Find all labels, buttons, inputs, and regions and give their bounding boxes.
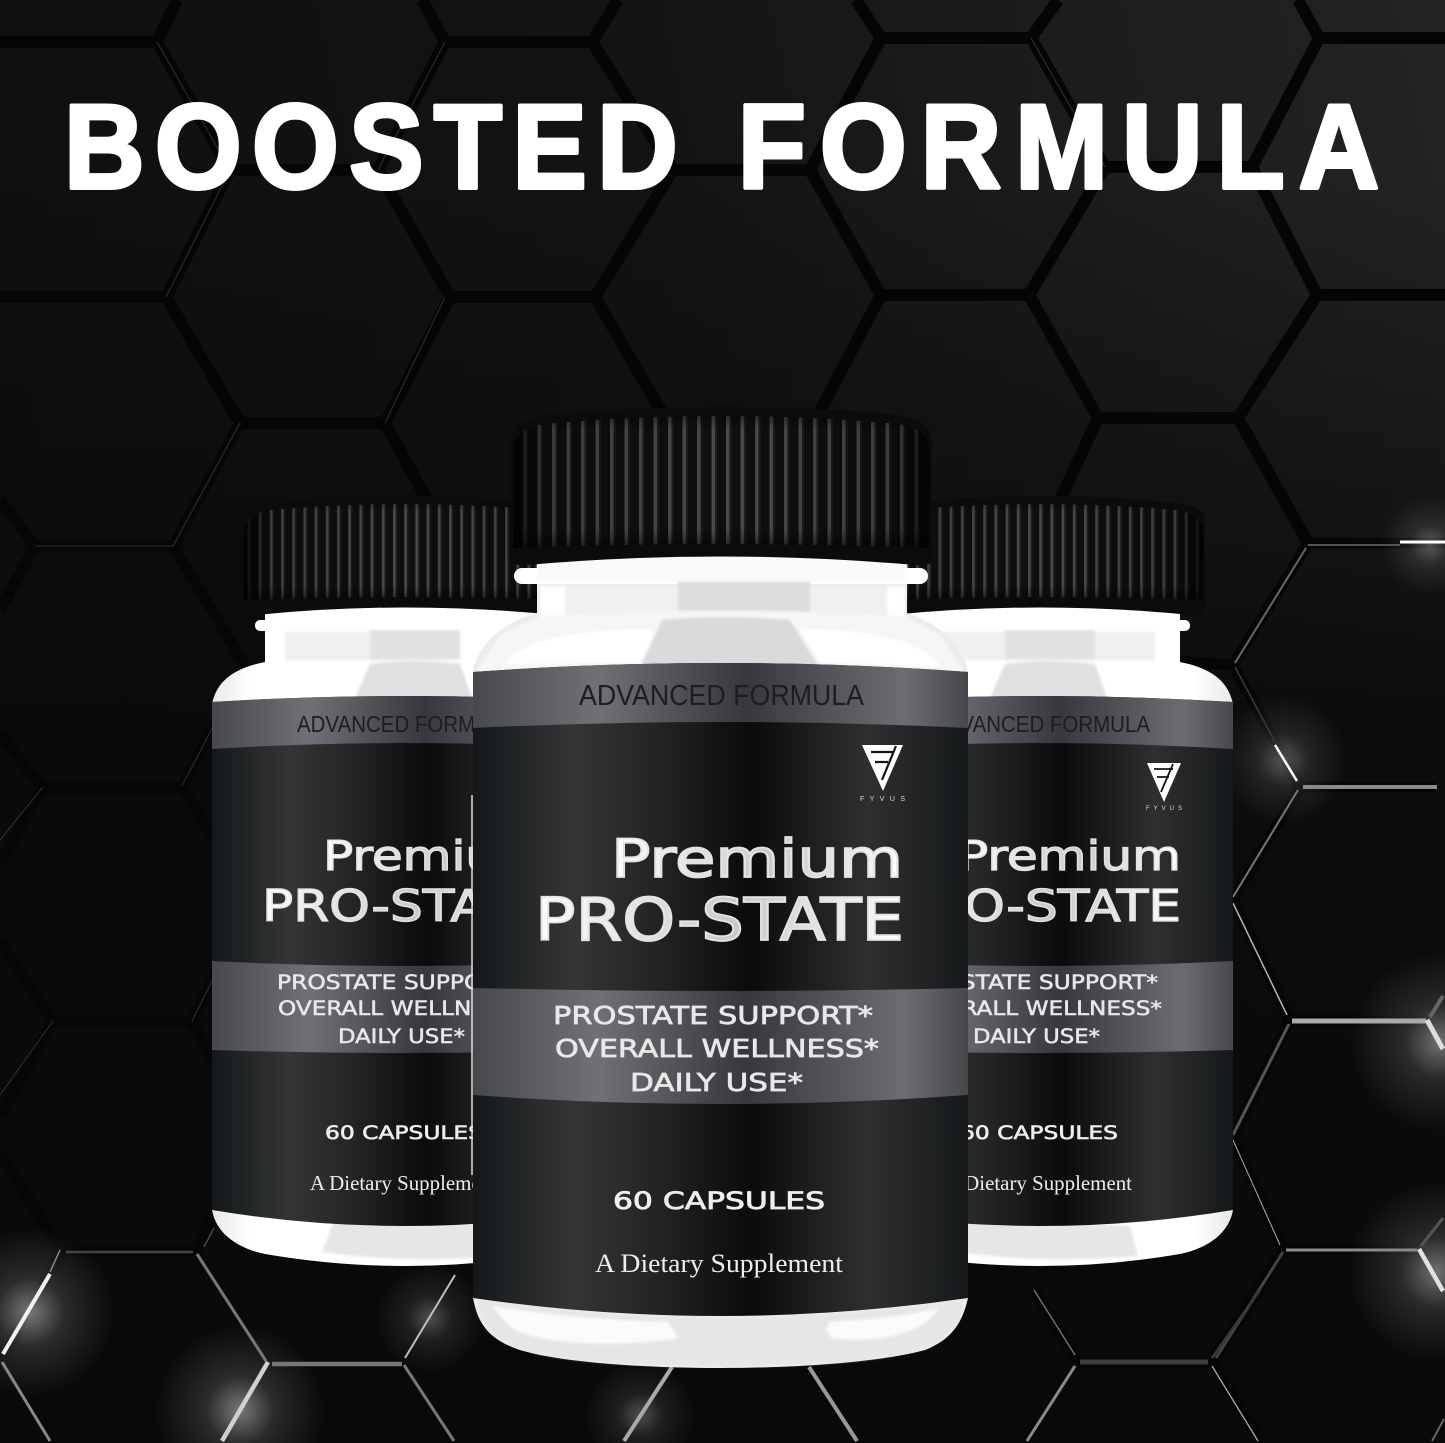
benefits list: DAILY USE* bbox=[630, 1068, 803, 1097]
product name bbox=[535, 829, 904, 954]
left bottle label: PRO-STATE bbox=[262, 881, 546, 932]
right bottle label bbox=[847, 696, 1233, 1226]
right bottle label: DAILY USE* bbox=[973, 1025, 1100, 1048]
center front bottle bbox=[472, 407, 968, 1368]
left bottle label: PROSTATE SUPPORT* bbox=[277, 971, 523, 994]
title: BOOSTED FORMULA bbox=[64, 79, 1393, 214]
dietary supplement line: A Dietary Supplement bbox=[595, 1249, 844, 1278]
right bottle label: PROSTATE SUPPORT* bbox=[912, 971, 1158, 994]
right bottle label: FYVUS bbox=[1146, 806, 1182, 812]
left bottle label: DAILY USE* bbox=[338, 1025, 465, 1048]
right bottle label: ADVANCED FORMULA bbox=[932, 711, 1151, 737]
capsule count: 60 CAPSULES bbox=[613, 1187, 825, 1215]
left back bottle bbox=[212, 504, 537, 1266]
center bottle cap bbox=[510, 407, 932, 565]
left bottle label: Premium bbox=[323, 832, 546, 880]
left bottle label: 60 CAPSULES bbox=[325, 1122, 483, 1144]
cap bbox=[877, 496, 1205, 615]
right bottle label: 60 CAPSULES bbox=[960, 1122, 1118, 1144]
right bottle label: PRO-STATE bbox=[897, 881, 1181, 932]
product name: Premium bbox=[611, 829, 903, 890]
left bottle label: ADVANCED FORMULA bbox=[297, 711, 516, 737]
product name: PRO-STATE bbox=[535, 885, 904, 954]
left bottle cap bbox=[244, 504, 537, 614]
right bottle label: OVERALL WELLNESS* bbox=[913, 997, 1162, 1020]
right bottle label: A Dietary Supplement bbox=[945, 1171, 1132, 1195]
center bottle white body bbox=[473, 552, 968, 1368]
label: advanced formula: ADVANCED FORMULA bbox=[579, 680, 865, 712]
icon: FYVUS logo: FYVUS bbox=[860, 796, 905, 803]
glass highlights bbox=[476, 556, 965, 1366]
icon: FYVUS logo bbox=[860, 745, 905, 803]
right bottle label: Premium bbox=[958, 832, 1181, 880]
benefits list: OVERALL WELLNESS* bbox=[555, 1034, 879, 1063]
left bottle label bbox=[212, 696, 598, 1226]
center bottle label bbox=[473, 663, 968, 1316]
glow spots along lit edges bbox=[0, 495, 1445, 1443]
benefits list: PROSTATE SUPPORT* bbox=[553, 1001, 873, 1030]
benefits list bbox=[553, 1001, 879, 1097]
left bottle label: A Dietary Supplement bbox=[310, 1171, 497, 1195]
neck ring bbox=[514, 568, 928, 584]
left bottle label: OVERALL WELLNESS* bbox=[278, 997, 527, 1020]
right back bottle bbox=[907, 498, 1233, 1266]
